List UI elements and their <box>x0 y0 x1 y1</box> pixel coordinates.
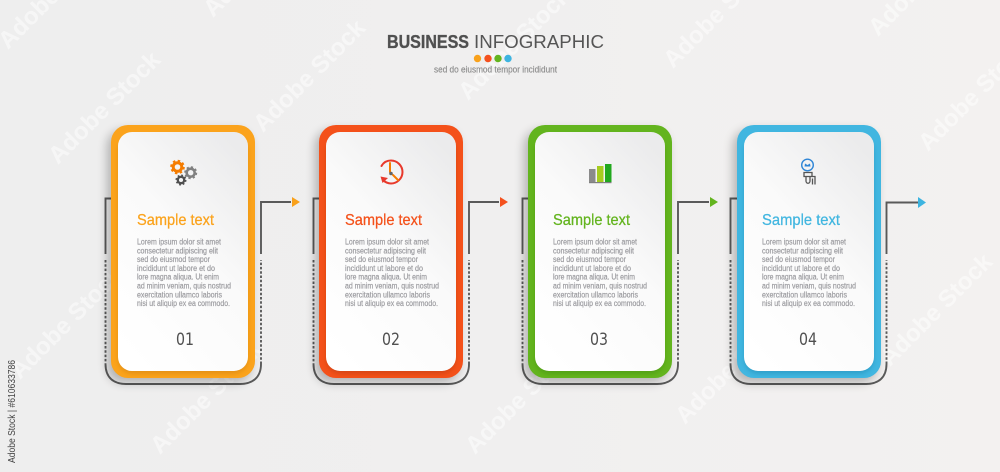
watermark: Adobe Stock <box>875 248 998 371</box>
title: BUSINESS <box>387 32 469 52</box>
body text: lore magna aliqua. Ut enim <box>762 273 844 282</box>
body text: exercitation ullamco laboris <box>137 290 222 299</box>
body text: sed do eiusmod tempor <box>345 255 418 264</box>
colour dots <box>474 55 512 62</box>
body text: sed do eiusmod tempor <box>553 255 626 264</box>
number: 01 <box>176 330 194 349</box>
arrow head 2 <box>500 197 508 207</box>
watermark: Adobe Stock <box>248 14 371 137</box>
panel: step 3 <box>522 125 718 384</box>
arrow head 1 <box>292 197 300 207</box>
watermark: Adobe Stock <box>670 306 793 429</box>
title second word: INFOGRAPHIC <box>474 32 604 52</box>
body text: consectetur adipiscing elit <box>137 246 219 255</box>
body text: incididunt ut labore et do <box>762 264 840 273</box>
number: 04 <box>799 330 817 349</box>
body text: exercitation ullamco laboris <box>762 290 847 299</box>
body text: nisi ut aliquip ex ea commodo. <box>762 299 855 308</box>
body text <box>137 238 231 308</box>
body text: Lorem ipsum dolor sit amet <box>553 238 638 246</box>
panel: step 4 <box>730 125 926 384</box>
body text <box>345 238 439 308</box>
connector bracket 1 <box>106 198 291 384</box>
body text: lore magna aliqua. Ut enim <box>345 273 427 282</box>
connector bracket 3 <box>522 198 709 384</box>
body text: incididunt ut labore et do <box>553 264 631 273</box>
body text: consectetur adipiscing elit <box>345 246 427 255</box>
body text: incididunt ut labore et do <box>345 264 423 273</box>
body text: sed do eiusmod tempor <box>137 255 210 264</box>
icon: bar chart <box>589 164 612 183</box>
body text: nisi ut aliquip ex ea commodo. <box>553 299 646 308</box>
body text: lore magna aliqua. Ut enim <box>553 273 635 282</box>
body text: nisi ut aliquip ex ea commodo. <box>137 299 230 308</box>
heading: Sample text <box>137 212 215 229</box>
body text: Lorem ipsum dolor sit amet <box>137 238 222 246</box>
icon: clock <box>380 160 402 184</box>
body text: ad minim veniam, quis nostrud <box>553 282 647 290</box>
arrow head 4 <box>918 197 926 208</box>
body text: ad minim veniam, quis nostrud <box>137 282 231 290</box>
body text <box>553 238 647 308</box>
watermark: Adobe Stock <box>43 46 166 169</box>
watermark: Adobe Stock <box>5 261 128 384</box>
stock id: Adobe Stock | #610633786 <box>6 360 18 463</box>
icon: light bulb <box>802 159 815 184</box>
number: 03 <box>590 330 608 349</box>
body text: consectetur adipiscing elit <box>553 246 635 255</box>
body text: sed do eiusmod tempor <box>762 255 835 264</box>
heading: Sample text <box>553 212 631 229</box>
arrow head 3 <box>710 197 718 207</box>
body text: Lorem ipsum dolor sit amet <box>762 238 847 246</box>
body text: nisi ut aliquip ex ea commodo. <box>345 299 438 308</box>
panel: step 2 <box>314 125 508 384</box>
subtitle: sed do eiusmod tempor incididunt <box>434 64 557 74</box>
body text: ad minim veniam, quis nostrud <box>345 282 439 290</box>
body text: consectetur adipiscing elit <box>762 246 844 255</box>
heading: Sample text <box>345 212 423 229</box>
body text: incididunt ut labore et do <box>137 264 215 273</box>
body text: exercitation ullamco laboris <box>553 290 638 299</box>
body text: exercitation ullamco laboris <box>345 290 430 299</box>
heading: Sample text <box>762 212 841 229</box>
connector bracket 2 <box>314 198 499 384</box>
watermark: Adobe Stock <box>145 336 268 459</box>
body text <box>762 238 856 308</box>
body text: lore magna aliqua. Ut enim <box>137 273 219 282</box>
number: 02 <box>382 330 400 349</box>
body text: Lorem ipsum dolor sit amet <box>345 238 430 246</box>
icon: gears <box>171 161 196 185</box>
panel: step 1 <box>106 125 300 384</box>
body text: ad minim veniam, quis nostrud <box>762 282 856 290</box>
connector bracket 4 <box>730 198 918 384</box>
watermark: Adobe Stock <box>460 336 583 459</box>
